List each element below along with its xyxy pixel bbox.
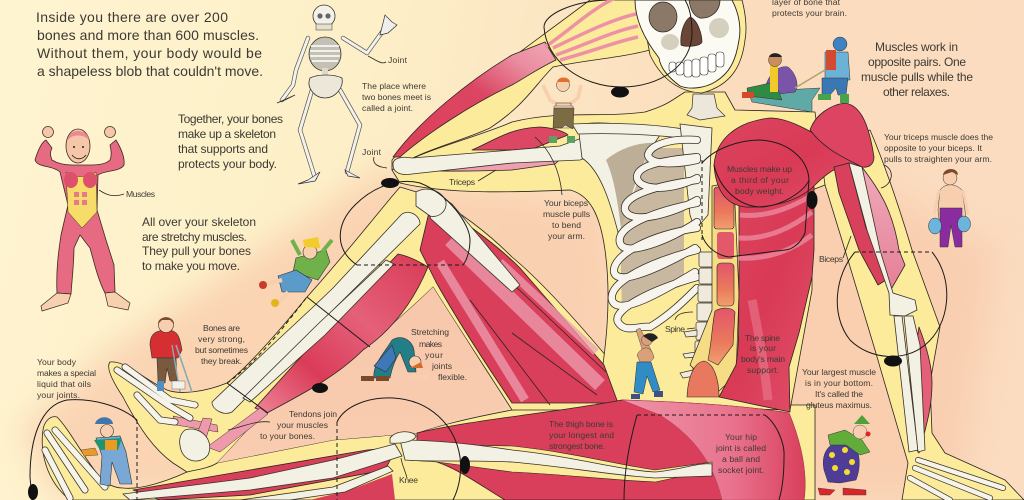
collar bone	[572, 123, 697, 139]
bone: femur raised	[430, 196, 520, 292]
yellow thigh strip	[405, 444, 712, 482]
body: forearm base	[392, 0, 650, 170]
muscle: chest	[714, 118, 865, 207]
intro text: Without them, your body would be	[37, 45, 262, 61]
text: tendons: to your bones.	[260, 431, 315, 441]
text: biceps	[543, 198, 590, 241]
abdominal muscle 2	[717, 232, 734, 259]
muscle: biceps upper	[472, 127, 568, 150]
small labels: Joint	[388, 55, 408, 65]
text: gluteus: Your largest muscle	[802, 367, 876, 377]
ribs	[612, 140, 697, 328]
muscle: raised thigh	[420, 205, 618, 403]
text: spine: support.	[747, 365, 779, 375]
abdominal muscle 3	[717, 263, 734, 306]
small labels: Knee	[399, 475, 418, 485]
text: triceps: opposite to your biceps. It	[884, 143, 983, 153]
text: hip: joint is called	[715, 443, 766, 453]
text: triceps: pulls to straighten your arm.	[884, 154, 992, 164]
bone: knee cap flat	[390, 432, 416, 443]
text: gluteus: gluteus maximus.	[806, 400, 872, 410]
text: hip: a ball and	[722, 454, 760, 464]
text: opposite pairs: opposite pairs. One	[868, 55, 966, 69]
text: body weight: Muscles make up	[727, 164, 792, 174]
eye socket right	[689, 0, 720, 18]
boy pulling sled	[795, 37, 850, 103]
text: thigh bone: your longest and	[549, 430, 614, 440]
text: tendons: Tendons join	[289, 409, 337, 419]
bone: arm humerus	[849, 163, 917, 316]
muscle: lower shin	[310, 474, 395, 500]
body: left arm base	[815, 130, 1024, 500]
kid bending backward	[361, 338, 428, 381]
shoulder blade shade	[606, 143, 655, 235]
eye socket left	[649, 2, 677, 32]
body: flat leg base	[42, 405, 815, 500]
spine	[680, 252, 717, 378]
text: liquid: your joints.	[37, 390, 80, 400]
muscle: deltoid	[810, 103, 874, 167]
text: stretching: flexible.	[438, 372, 467, 382]
intro text	[36, 9, 263, 79]
text: liquid: Your body	[37, 357, 77, 367]
small labels: Biceps	[819, 254, 843, 264]
body: torso and upper arm	[392, 92, 825, 410]
muscle: flat shin	[133, 447, 397, 500]
text: gluteus	[802, 367, 876, 410]
bone: lower arm	[894, 316, 925, 452]
text: joint definition: The place where	[362, 81, 426, 91]
bone: fibula	[243, 260, 394, 402]
intro text: Inside you there are over 200	[36, 9, 228, 25]
shoulder blade	[578, 123, 660, 240]
text: thigh bone: The thigh bone is	[549, 419, 613, 429]
gap between legs	[217, 287, 508, 463]
text: stretching	[411, 327, 467, 382]
text: thigh bone	[549, 419, 614, 451]
text: skeleton	[178, 112, 283, 171]
text: biceps: your arm.	[548, 231, 585, 241]
skull	[635, 0, 740, 88]
bone: thigh flat	[400, 440, 712, 478]
small labels: Spine	[665, 324, 685, 334]
nose	[681, 17, 702, 46]
kid with crutch	[150, 317, 192, 392]
intro text: bones and more than 600 muscles.	[37, 27, 259, 43]
muscle: upper arm biceps	[834, 163, 886, 285]
text: spine	[741, 333, 785, 375]
boy climbing spine	[631, 328, 663, 399]
small labels: Joint	[362, 147, 382, 157]
text: stretching: your	[425, 350, 443, 360]
thigh highlights	[440, 240, 600, 400]
text: spine: The spine	[745, 333, 780, 343]
muscle: flat thigh	[417, 400, 805, 500]
text: opposite pairs: muscle pulls while the	[861, 70, 973, 84]
text: thigh bone: strongest bone.	[549, 441, 605, 451]
boy with shorts	[543, 78, 581, 143]
muscle: forearm	[393, 42, 556, 157]
bone: heel	[180, 429, 210, 461]
muscle: lower arm	[908, 327, 932, 453]
text: biceps: to bend	[552, 220, 581, 230]
tendons: ankle	[173, 408, 268, 452]
text: muscles: They pull your bones	[142, 244, 251, 258]
text: skull	[772, 0, 847, 18]
text: hip: socket joint.	[718, 465, 764, 475]
sternum	[680, 124, 712, 230]
abdominal frame	[690, 182, 739, 392]
text: muscles: are stretchy muscles.	[142, 230, 247, 244]
text: muscles: All over your skeleton	[142, 215, 256, 229]
text: skull: protects your brain.	[772, 8, 847, 18]
text: spine: is your	[750, 343, 776, 353]
text: biceps: muscle pulls	[543, 209, 590, 219]
muscle: serratus bands	[738, 195, 813, 400]
boy on sled	[742, 53, 820, 112]
bone: shin	[212, 212, 420, 413]
text: gluteus: It's called the	[815, 389, 863, 399]
bone: fibula flat	[240, 466, 393, 500]
kid sliding	[259, 237, 332, 307]
text: skeleton: that supports and	[178, 142, 268, 156]
clown	[818, 415, 870, 495]
bones: raised foot	[117, 367, 195, 422]
text: stretching: Stretching	[411, 327, 449, 337]
muscle man	[35, 126, 130, 311]
bone: knee cap	[416, 189, 446, 216]
text: tendons	[260, 409, 337, 441]
muscle: triceps strip	[412, 155, 565, 171]
text: triceps	[884, 132, 993, 164]
head halo	[640, 0, 746, 93]
text: stretching: makes	[419, 339, 442, 349]
thigh lines	[470, 283, 606, 405]
text: skeleton: protects your body.	[178, 157, 277, 171]
text: liquid: liquid that oils	[37, 379, 91, 389]
small labels: Muscles	[126, 189, 155, 199]
muscle: gluteus highlight	[622, 400, 805, 500]
intro text: a shapeless blob that couldn't move.	[37, 63, 263, 79]
pointer lines	[99, 56, 891, 478]
text: liquid	[37, 357, 96, 400]
muscle: side block	[719, 180, 814, 412]
text: gluteus: is in your bottom.	[805, 378, 873, 388]
muscle: upper arm triceps	[862, 167, 905, 293]
text: hip: Your hip	[725, 432, 757, 442]
text: break	[195, 323, 248, 366]
pelvis dome	[687, 361, 719, 397]
text: joint definition: called a joint.	[362, 103, 413, 113]
teeth	[669, 52, 724, 77]
text: joint definition: two bones meet is	[362, 92, 431, 102]
text: muscles	[142, 215, 256, 273]
boy with bags	[928, 169, 970, 247]
text: joint definition	[362, 81, 431, 113]
bones: flat foot	[45, 430, 105, 498]
text: skeleton: make up a skeleton	[178, 127, 276, 141]
text: break: very strong,	[198, 334, 245, 344]
text: opposite pairs: Muscles work in	[875, 40, 958, 54]
cheek shading	[661, 18, 729, 50]
text: opposite pairs	[861, 40, 973, 99]
text: break: they break.	[201, 356, 242, 366]
small labels: Triceps	[449, 177, 475, 187]
body: raised leg base	[109, 187, 620, 472]
bone: humerus	[393, 138, 592, 175]
small skeleton	[277, 5, 397, 184]
small labels	[126, 55, 843, 485]
text: muscles: to make you move.	[142, 259, 240, 273]
text: stretching: joints	[431, 361, 452, 371]
text: hip	[715, 432, 766, 475]
text: triceps: Your triceps muscle does the	[884, 132, 993, 142]
hand bones	[910, 460, 1003, 500]
text: body weight	[727, 164, 792, 196]
text: break: but sometimes	[195, 345, 248, 355]
tendons: forearm	[545, 0, 638, 60]
text: liquid: makes a special	[37, 368, 96, 378]
text: opposite pairs: other relaxes.	[883, 85, 950, 99]
text: body weight: body weight.	[735, 186, 784, 196]
neck vertebrae	[687, 94, 725, 120]
worker with oil can	[81, 417, 132, 486]
abdominal muscle 4	[708, 308, 735, 365]
text: break: Bones are	[203, 323, 240, 333]
text: biceps: Your biceps	[544, 198, 588, 208]
text: tendons: your muscles	[277, 420, 328, 430]
text: skeleton: Together, your bones	[178, 112, 283, 126]
muscle: calf	[255, 254, 428, 413]
black half balls	[28, 86, 902, 500]
abdominal muscle 1	[714, 187, 734, 229]
text: body weight: a third of your	[731, 175, 789, 185]
bone: shin flat	[123, 444, 402, 500]
rib cage shade	[620, 148, 684, 310]
text: spine: body's main	[741, 354, 785, 364]
